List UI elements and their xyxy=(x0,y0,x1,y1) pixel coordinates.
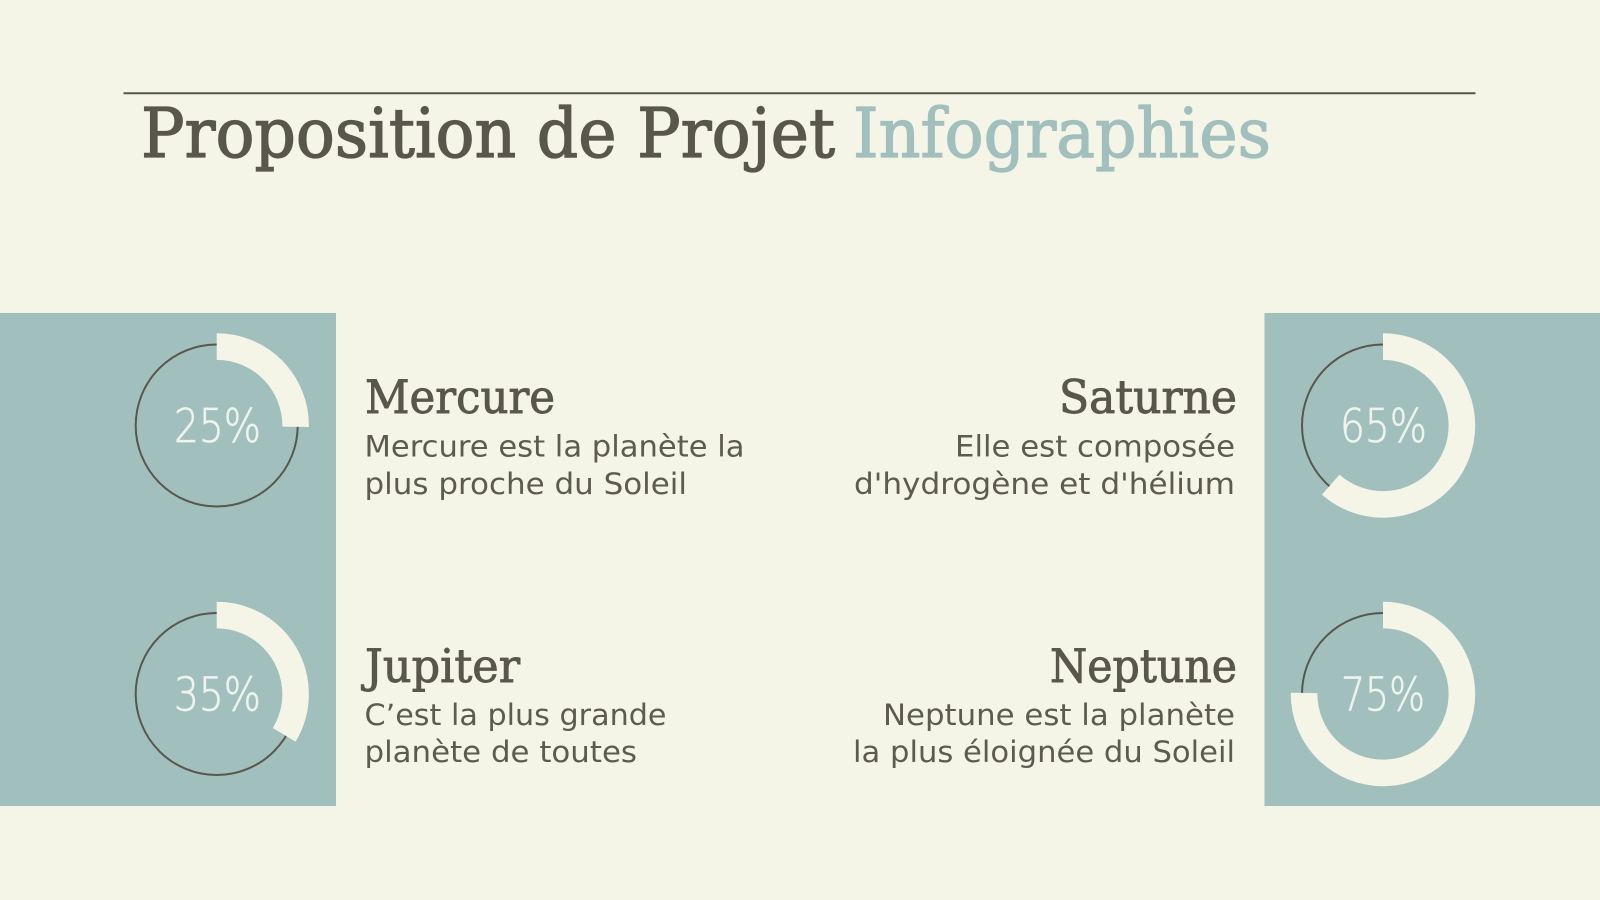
text block: Mercure xyxy=(364,370,744,501)
title: Infographies xyxy=(853,95,1271,174)
text block: Saturne xyxy=(854,370,1237,501)
panel: right teal band xyxy=(1264,313,1600,806)
donut chart: Saturne 65% xyxy=(1302,344,1464,506)
text block: Mercure: Mercure est la planète la xyxy=(364,430,744,464)
donut chart: Neptune 75%: 75% xyxy=(1341,668,1425,722)
donut chart: Neptune 75% xyxy=(1302,613,1464,775)
text block: Saturne: Saturne xyxy=(1059,370,1237,424)
text block: Saturne: d'hydrogène et d'hélium xyxy=(854,467,1235,501)
text block: Jupiter xyxy=(361,639,666,769)
text block: Saturne: Elle est composée xyxy=(955,430,1235,464)
donut chart: Saturne 65%: 65% xyxy=(1340,399,1427,453)
text block: Mercure: plus proche du Soleil xyxy=(364,467,687,501)
title xyxy=(141,95,1271,174)
text block: Neptune: la plus éloignée du Soleil xyxy=(853,735,1235,769)
text block: Jupiter: C’est la plus grande xyxy=(364,698,666,732)
text block: Jupiter: Jupiter xyxy=(361,639,520,693)
donut chart: Jupiter 35%: 35% xyxy=(174,668,261,722)
donut chart: Jupiter 35% xyxy=(136,613,298,775)
title: Proposition de Projet xyxy=(141,95,835,174)
donut chart: Mercure 25%: 25% xyxy=(174,399,261,453)
text block: Neptune xyxy=(853,639,1237,769)
donut chart: Mercure 25% xyxy=(136,344,298,506)
text block: Neptune: Neptune xyxy=(1050,639,1237,693)
panel: left teal band xyxy=(0,313,336,806)
text block: Neptune: Neptune est la planète xyxy=(883,698,1235,732)
text block: Jupiter: planète de toutes xyxy=(364,735,637,769)
text block: Mercure: Mercure xyxy=(365,370,555,424)
